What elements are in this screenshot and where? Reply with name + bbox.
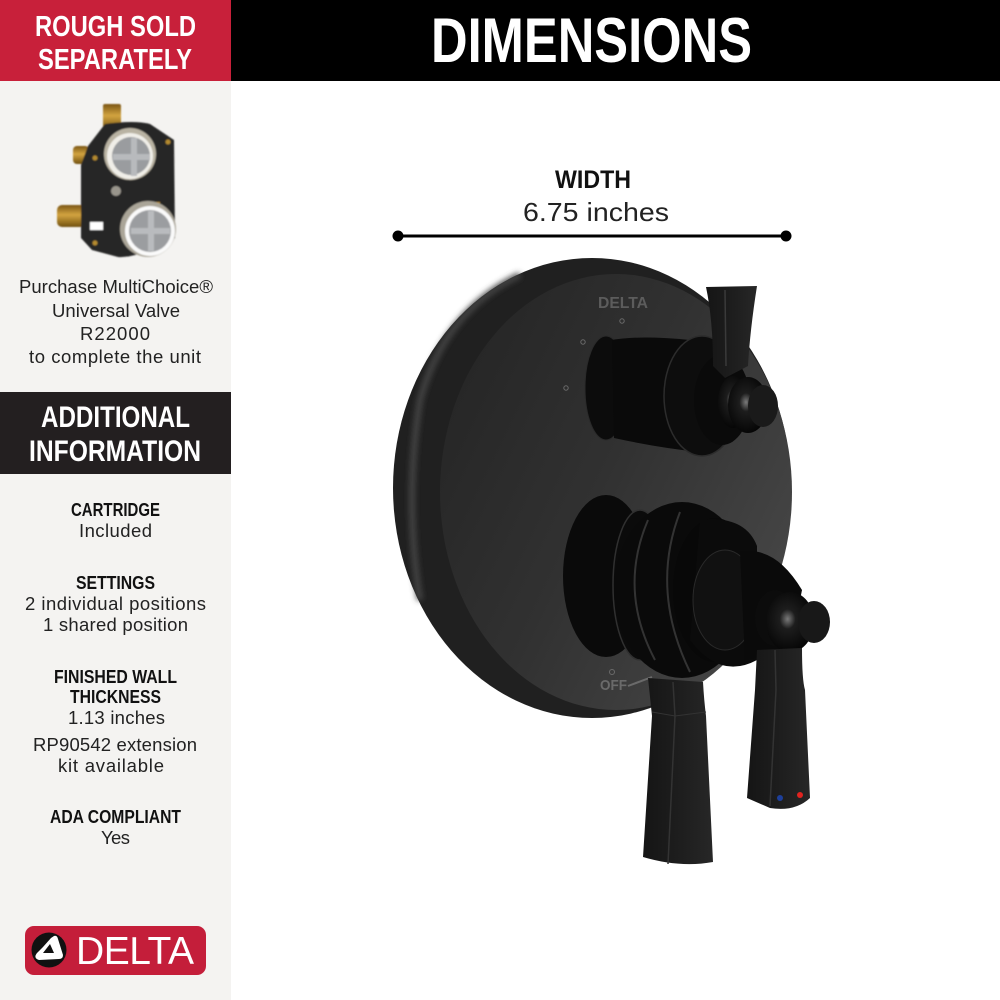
text: purchase note: Universal Valve <box>52 300 180 321</box>
text: finished wall thickness: THICKNESS <box>70 687 161 707</box>
text: purchase note: R22000 <box>80 323 150 344</box>
lower handle <box>563 495 830 678</box>
banner: rough sold separately <box>0 0 231 81</box>
arrow: width dimension line <box>392 230 792 242</box>
lower-right lever with hot and cold marks <box>747 648 810 809</box>
icon: rough valve product image <box>57 104 176 257</box>
heading: additional information: INFORMATION <box>29 435 201 468</box>
product: matte black shower valve trim <box>393 258 830 864</box>
text: purchase note: Purchase MultiChoice® <box>19 276 213 297</box>
text: ada compliant: Yes <box>101 827 130 848</box>
text: finished wall thickness: kit available <box>58 755 164 776</box>
wall plate <box>393 258 792 718</box>
text: cartridge: Included <box>79 520 152 541</box>
width label: 6.75 inches <box>523 197 669 227</box>
title: dimensions: DIMENSIONS <box>431 6 752 76</box>
text: purchase note: to complete the unit <box>29 346 201 367</box>
text: settings: 2 individual positions <box>25 593 206 614</box>
heading: additional information <box>0 392 231 474</box>
lower-left lever <box>643 678 713 864</box>
text: finished wall thickness: 1.13 inches <box>68 707 165 728</box>
plate logo and markings <box>564 295 652 694</box>
text: settings: 1 shared position <box>43 614 188 635</box>
text: cartridge: CARTRIDGE <box>71 500 160 520</box>
banner: rough sold separately: SEPARATELY <box>38 44 192 76</box>
text: settings: SETTINGS <box>76 573 155 593</box>
text: ada compliant: ADA COMPLIANT <box>50 807 181 827</box>
heading: additional information: ADDITIONAL <box>41 401 190 434</box>
title: dimensions <box>231 0 1000 81</box>
text: finished wall thickness: FINISHED WALL <box>54 667 177 687</box>
text: settings <box>25 573 206 635</box>
width label <box>523 166 669 227</box>
logo: delta <box>25 926 206 975</box>
text: finished wall thickness <box>33 667 197 776</box>
banner: rough sold separately: ROUGH SOLD <box>35 11 196 43</box>
text: cartridge <box>71 500 160 541</box>
left sidebar panel <box>0 0 231 1000</box>
plate logo and markings: OFF <box>600 677 627 694</box>
plate logo and markings: DELTA <box>598 295 648 312</box>
logo: delta: DELTA <box>76 930 194 973</box>
text: purchase note <box>19 276 213 367</box>
width label: WIDTH <box>555 166 631 194</box>
text: finished wall thickness: RP90542 extension <box>33 734 197 755</box>
upper diverter handle <box>585 286 778 456</box>
text: ada compliant <box>50 807 181 848</box>
